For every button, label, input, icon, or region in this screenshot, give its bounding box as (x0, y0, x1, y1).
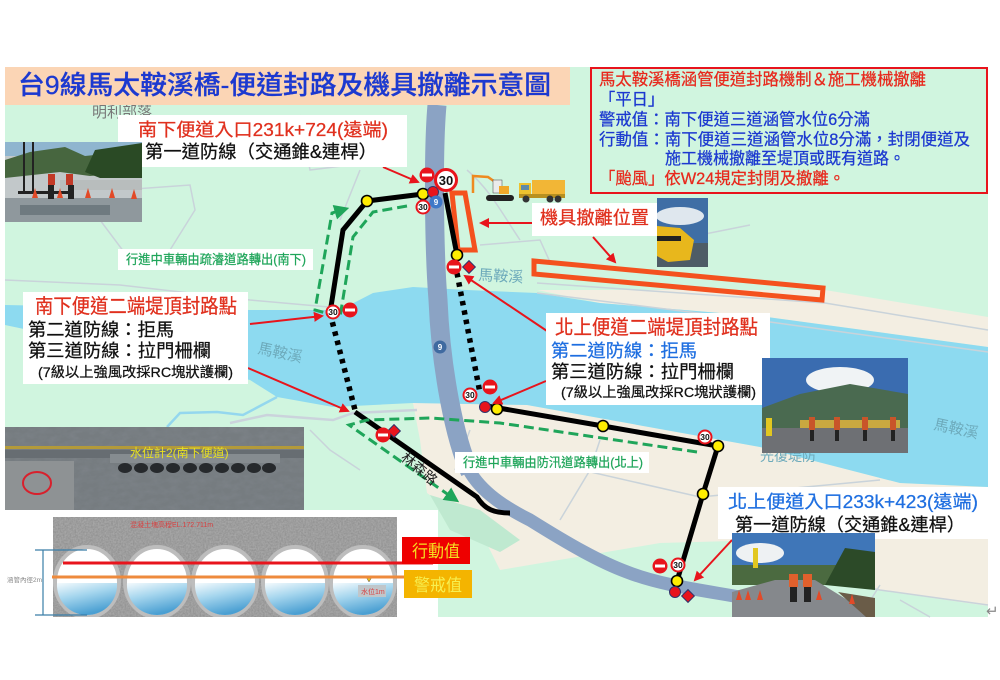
return glyph: ↵ (986, 603, 999, 620)
callout: north-bound embankment closure: 第三道防線：拉門柵欄 (551, 362, 734, 382)
photo: culvert with water gauge: 水位計2(南下便道) (130, 445, 229, 460)
callout: north-bound embankment closure: (7級以上強風改採RC塊狀護欄) (561, 384, 756, 400)
label: north detour note (455, 452, 649, 473)
photo: excavator (656, 198, 708, 267)
equipment withdrawal zones (452, 193, 823, 300)
callout: north-bound entrance (718, 487, 988, 539)
label: south detour note: 行進中車輛由疏濬道路轉出(南下) (126, 252, 306, 267)
south-bound bypass route (330, 194, 510, 513)
callout: south-bound embankment closure: 第三道防線：拉門柵欄 (28, 341, 211, 361)
callout: north-bound entrance: 第一道防線（交通錐&連桿） (735, 515, 965, 535)
speed limit signs 30: 30 (673, 560, 683, 570)
panel: closure mechanism rules: 馬太鞍溪橋涵管便道封路機制＆施工機械撤離 (599, 70, 926, 89)
road markers: red points and diamonds (388, 186, 694, 602)
photo: culvert with water gauge (5, 427, 304, 510)
icon: excavator (473, 176, 514, 201)
map place labels (92, 104, 980, 464)
chart: culvert water-level diagram: 水位1m (361, 587, 385, 596)
speed limit signs 30: 30 (328, 307, 338, 317)
red arrows (248, 167, 732, 580)
callout: south-bound embankment closure: 第二道防線：拒馬 (28, 320, 174, 340)
road: provincial highway 9 (434, 105, 740, 597)
callout: south-bound embankment closure (23, 292, 248, 384)
road markers: yellow cones points (362, 188, 724, 586)
road name label: 林森路 (398, 449, 441, 488)
chart: culvert water-level diagram: 混凝土塊高程EL.172.711m (130, 520, 213, 529)
label: action value (402, 537, 470, 564)
label: north detour note: 行進中車輛由防汛道路轉出(北上) (463, 455, 643, 470)
chart: culvert water-level diagram (5, 510, 438, 617)
callout: south-bound entrance: 第一道防線（交通錐&連桿） (145, 142, 377, 162)
callout: south-bound embankment closure: 南下便道二端堤頂封路點 (35, 295, 237, 318)
chart: culvert water-level diagram: 涵管內徑2m (7, 575, 42, 584)
green dashed detour routes (315, 206, 697, 498)
photo: south entrance barrier (5, 142, 142, 222)
icon: dump truck (519, 180, 565, 202)
label: warning value (404, 570, 472, 598)
speed limit signs 30: 30 (418, 202, 428, 212)
callout: north-bound entrance: 北上便道入口233k+423(遠端) (728, 492, 978, 512)
callout: south-bound entrance (118, 115, 407, 167)
photo: north entrance barrier (732, 533, 875, 617)
label: warning value: 警戒值 (414, 576, 462, 595)
no-entry signs (342, 168, 668, 574)
panel: closure mechanism rules (591, 68, 987, 193)
panel: closure mechanism rules: 警戒值：南下便道三道涵管水位6分滿 (599, 110, 870, 129)
panel: closure mechanism rules: 「颱風」依W24規定封閉及撤離。 (599, 170, 845, 188)
callout: equipment location label (532, 203, 657, 236)
speed limit signs 30: 30 (700, 432, 710, 442)
north-bound bypass route (445, 193, 718, 581)
callout: north-bound embankment closure (546, 313, 770, 405)
panel: closure mechanism rules: 施工機械撤離至堤頂或既有道路。 (665, 150, 905, 168)
callout: equipment location label: 機具撤離位置 (540, 208, 649, 228)
label: south detour note (118, 249, 313, 270)
panel: closure mechanism rules: 行動值：南下便道三道涵管水位8分滿，封閉便道及 (599, 130, 970, 149)
highway 9 shields: 9 (438, 343, 443, 352)
callout: north-bound embankment closure: 第二道防線：拒馬 (551, 341, 697, 361)
callout: south-bound entrance: 南下便道入口231k+724(遠端) (138, 120, 388, 140)
highway 9 shields (430, 196, 446, 354)
highway 9 shields: 9 (434, 198, 439, 207)
speed limit signs 30 (326, 170, 712, 572)
map place labels: 明利部落 (92, 104, 152, 121)
panel: closure mechanism rules: 「平日」 (599, 91, 664, 109)
title: 台9線馬太鞍溪橋-便道封路及機具撤離示意圖 (18, 70, 551, 100)
speed limit signs 30: 30 (465, 390, 475, 400)
speed limit signs 30: 30 (439, 173, 453, 188)
map place labels: 馬鞍溪 (256, 340, 304, 366)
map place labels: 馬鞍溪 (478, 267, 524, 286)
callout: north-bound embankment closure: 北上便道二端堤頂封路點 (555, 316, 758, 339)
map background (5, 67, 988, 617)
photo: embankment barrier (762, 358, 908, 453)
map place labels: 光復堤防 (760, 448, 816, 464)
map place labels: 馬鞍溪 (932, 416, 980, 442)
label: action value: 行動值 (412, 542, 460, 561)
callout: south-bound embankment closure: (7級以上強風改採RC塊狀護欄) (38, 364, 233, 380)
